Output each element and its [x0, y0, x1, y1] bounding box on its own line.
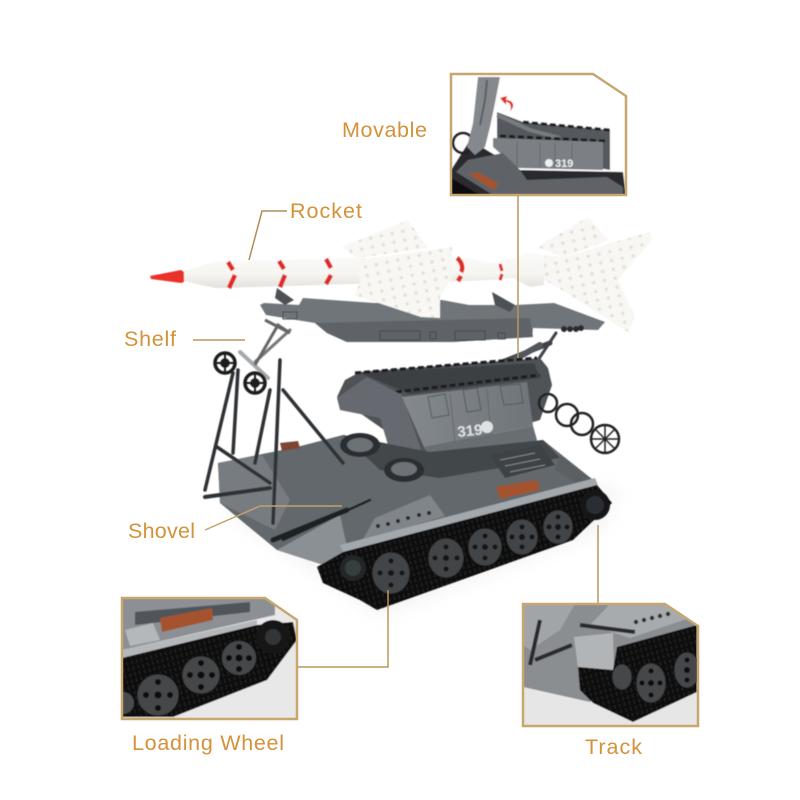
leader line: loading wheel: [298, 590, 388, 667]
inset: movable launcher: [451, 74, 626, 195]
support frame: [205, 330, 370, 540]
leader line: shelf: [193, 339, 245, 341]
rear storage brick: [280, 441, 300, 451]
label: Shelf: Shelf: [124, 327, 176, 351]
main model: rocket launcher tank: [150, 217, 652, 610]
drive sprocket rear: [580, 490, 610, 520]
rivet row: [376, 511, 431, 528]
tank hull deck: [218, 433, 597, 567]
rocket big rear fin: [544, 232, 652, 332]
rocket rear fins: [537, 217, 608, 257]
road wheels: [372, 510, 573, 594]
launcher hydraulic arm: [447, 333, 556, 385]
inset: loading wheel: [112, 598, 297, 719]
label: Movable: Movable: [342, 118, 427, 142]
label: Shovel: Shovel: [128, 519, 195, 543]
track: [317, 485, 612, 610]
handwheels: [215, 353, 265, 393]
launcher turret: [337, 358, 552, 462]
idler wheel front: [340, 555, 366, 581]
label: Rocket: Rocket: [290, 199, 362, 223]
rocket body: [184, 252, 544, 288]
rocket: [150, 217, 652, 332]
rocket nose cone: [150, 270, 184, 283]
rear spare wheels: [539, 394, 619, 453]
rocket red bands: [228, 258, 502, 288]
leader line: track: [597, 525, 599, 604]
leader line: rocket: [249, 211, 287, 260]
leader line: movable: [517, 195, 519, 358]
inset: track: [523, 604, 700, 726]
rocket front fin cluster: [354, 247, 452, 318]
shovel on deck: [496, 480, 540, 499]
rocket front upper fin: [342, 220, 428, 258]
ground shadow: [225, 480, 620, 615]
inset: movable launcher: 319: [555, 158, 573, 170]
leader line: shovel: [205, 506, 342, 530]
launcher shelf: [255, 288, 605, 365]
turret number marking: 319: [457, 421, 483, 441]
deck edge: [340, 478, 598, 555]
label: Track: Track: [585, 735, 642, 759]
label: Loading Wheel: Loading Wheel: [132, 731, 284, 755]
